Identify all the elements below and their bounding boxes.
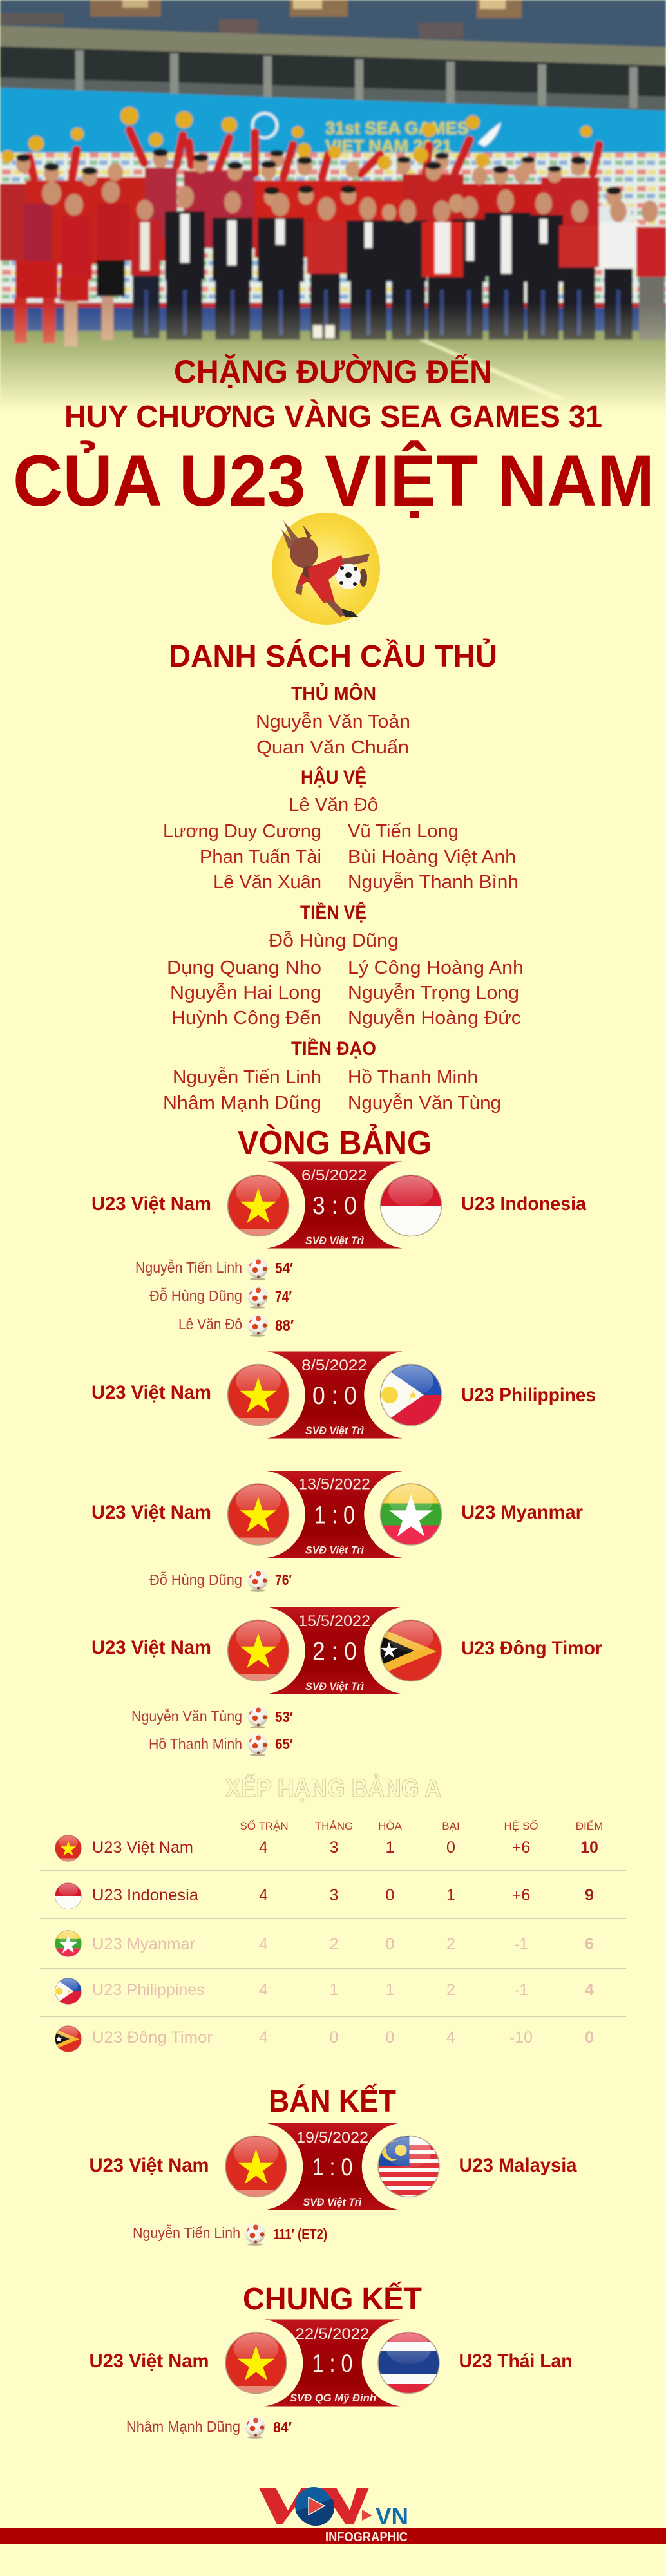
match 2: Vietnam 0-0 Philippines: 0 : 0: [312, 1382, 357, 1410]
row: Myanmar: 0: [386, 1935, 394, 1953]
front row red jackets: [307, 222, 347, 274]
row: Vietnam: U23 Việt Nam: [92, 1839, 193, 1857]
midfielders: [167, 902, 524, 1028]
forwards: Nguyễn Văn Tùng: [348, 1092, 501, 1113]
scorer: semi-final: 111′ (ET2): [273, 2226, 327, 2242]
heading: player list: DANH SÁCH CẦU THỦ: [169, 638, 497, 674]
row: Vietnam: 4: [259, 1839, 268, 1857]
match 2: Vietnam 0-0 Philippines: SVĐ Việt Trì: [305, 1425, 364, 1437]
scorers: match 4: 53′: [275, 1709, 293, 1725]
match 1: Vietnam 3-0 Indonesia: 6/5/2022: [301, 1167, 367, 1184]
defenders: Lê Văn Xuân: [213, 872, 321, 893]
scorers: match 4: Hồ Thanh Minh: [149, 1736, 242, 1752]
final match: Vietnam 1-0 Thailand: U23 Việt Nam: [89, 2351, 209, 2372]
scorer: final: Nhâm Mạnh Dũng: [126, 2418, 240, 2435]
scorers: match 3: [149, 1570, 292, 1592]
match 3: Vietnam 1-0 Myanmar: 1 : 0: [314, 1502, 355, 1529]
midfielders: Nguyễn Hoàng Đức: [348, 1007, 521, 1028]
defenders: Lê Văn Đô: [289, 795, 378, 815]
defenders: Lương Duy Cương: [163, 821, 321, 842]
row: Myanmar: [55, 1930, 594, 1957]
row: Philippines: 4: [585, 1981, 594, 1999]
title: [13, 354, 654, 521]
defenders: Bùi Hoàng Việt Anh: [348, 847, 516, 867]
forwards: Nhâm Mạnh Dũng: [163, 1093, 321, 1113]
hero photo: team celebrating on the podium: 31st SEA GAMES: [325, 118, 469, 138]
midfielders: Huỳnh Công Đến: [171, 1008, 321, 1028]
hero photo: team celebrating on the podium: VIET NAM 2021: [325, 137, 452, 156]
row: Indonesia: +6: [512, 1886, 530, 1904]
scorer: final: 84′: [273, 2419, 292, 2436]
match 1: Vietnam 3-0 Indonesia: SVĐ Việt Trì: [305, 1235, 364, 1247]
row: Indonesia: 0: [386, 1886, 394, 1904]
match 3: Vietnam 1-0 Myanmar: U23 Việt Nam: [91, 1502, 211, 1523]
gaps between the legs: [144, 290, 620, 335]
title: CHẶNG ĐƯỜNG ĐẾN: [174, 354, 492, 390]
front row players: [24, 204, 52, 265]
row: Timor-Leste: 0: [330, 2029, 338, 2047]
match 3: Vietnam 1-0 Myanmar: U23 Myanmar: [461, 1502, 583, 1523]
row: Philippines: 1: [330, 1981, 338, 1999]
midfielders: Nguyễn Hai Long: [170, 982, 321, 1003]
row: Vietnam: 10: [580, 1839, 598, 1857]
defenders: Phan Tuấn Tài: [200, 847, 321, 867]
row: Vietnam: 0: [446, 1839, 455, 1857]
scorers: match 3: Đỗ Hùng Dũng: [149, 1571, 242, 1588]
heading: group stage: VÒNG BẢNG: [238, 1124, 432, 1162]
table header: SỐ TRẬN: [240, 1819, 289, 1832]
row: Philippines: [54, 1977, 594, 2005]
defenders: HẬU VỆ: [301, 766, 366, 788]
match 3: Vietnam 1-0 Myanmar: 13/5/2022: [298, 1476, 370, 1493]
row: Indonesia: 3: [330, 1886, 338, 1904]
semi-final match: Vietnam 1-0 Malaysia: 1 : 0: [312, 2154, 353, 2181]
player list: [163, 683, 524, 1113]
scorers: match 4: 65′: [275, 1736, 293, 1752]
front row officials in suits: [165, 211, 633, 340]
match 4: Vietnam 2-0 Timor-Leste: SVĐ Việt Trì: [305, 1680, 364, 1692]
match 4: Vietnam 2-0 Timor-Leste: U23 Đông Timor: [461, 1638, 602, 1659]
scorers: match 1: Đỗ Hùng Dũng: [149, 1287, 242, 1304]
row: Philippines: -1: [514, 1981, 528, 1999]
scorers: match 1: 88′: [275, 1317, 294, 1334]
goalkeepers: THỦ MÔN: [291, 683, 376, 705]
midfielders: Dụng Quang Nho: [167, 958, 321, 978]
row: Timor-Leste: [54, 2025, 594, 2052]
match 1: Vietnam 3-0 Indonesia: [91, 1162, 586, 1248]
scorers: match 1: 74′: [275, 1288, 292, 1305]
row: Philippines: 4: [259, 1981, 268, 1999]
row: Timor-Leste: 4: [446, 2029, 455, 2047]
row: Indonesia: 4: [259, 1886, 268, 1904]
goalkeepers: Quan Văn Chuẩn: [256, 737, 409, 758]
logo: VOV.VN: VN: [376, 2503, 408, 2530]
scorers: match 1: Lê Văn Đô: [178, 1316, 242, 1332]
scorers: match 4: [131, 1707, 293, 1756]
row: Vietnam: +6: [512, 1839, 530, 1857]
match 2: Vietnam 0-0 Philippines: U23 Việt Nam: [91, 1382, 211, 1403]
table header: BẠI: [442, 1820, 460, 1832]
row: Timor-Leste: U23 Đông Timor: [92, 2029, 213, 2047]
goalkeepers: Nguyễn Văn Toản: [256, 711, 410, 732]
table header: HỆ SỐ: [504, 1819, 538, 1832]
row: Vietnam: [55, 1835, 598, 1862]
row: Myanmar: 6: [585, 1935, 594, 1953]
semi-final match: Vietnam 1-0 Malaysia: 19/5/2022: [296, 2129, 368, 2146]
row: Philippines: 1: [386, 1981, 394, 1999]
midfielders: Đỗ Hùng Dũng: [269, 930, 399, 951]
semi-final match: Vietnam 1-0 Malaysia: U23 Việt Nam: [89, 2155, 209, 2176]
match 2: Vietnam 0-0 Philippines: 8/5/2022: [301, 1357, 367, 1374]
standings table: [40, 1819, 626, 2052]
row: Myanmar: -1: [514, 1935, 528, 1953]
goalkeepers: [256, 683, 410, 758]
row: Myanmar: 4: [259, 1935, 268, 1953]
scorer: semi-final: [133, 2223, 327, 2246]
final match: Vietnam 1-0 Thailand: SVĐ QG Mỹ Đình: [290, 2392, 376, 2404]
row: Myanmar: U23 Myanmar: [92, 1935, 195, 1953]
row: Vietnam: 1: [386, 1839, 394, 1857]
scorers: match 4: Nguyễn Văn Tùng: [131, 1708, 242, 1725]
final match: Vietnam 1-0 Thailand: 1 : 0: [312, 2350, 353, 2378]
semi-final match: Vietnam 1-0 Malaysia: SVĐ Việt Trì: [303, 2196, 362, 2208]
defenders: [163, 766, 519, 893]
raised arms: [30, 130, 599, 180]
match 4: Vietnam 2-0 Timor-Leste: 2 : 0: [312, 1638, 357, 1665]
title: CỦA U23 VIỆT NAM: [13, 440, 654, 521]
forwards: Nguyễn Tiến Linh: [173, 1066, 321, 1088]
table header: HÒA: [378, 1820, 403, 1832]
match 2: Vietnam 0-0 Philippines: [91, 1351, 596, 1439]
match 4: Vietnam 2-0 Timor-Leste: 15/5/2022: [298, 1613, 370, 1630]
match 3: Vietnam 1-0 Myanmar: SVĐ Việt Trì: [305, 1544, 364, 1556]
row: Indonesia: U23 Indonesia: [92, 1886, 198, 1904]
scorers: match 1: 54′: [275, 1260, 293, 1276]
row: Vietnam: 3: [330, 1839, 338, 1857]
back row heads: [16, 150, 622, 221]
scorers: match 1: [135, 1258, 294, 1337]
scorer: final: [126, 2416, 292, 2439]
midfielders: Nguyễn Trọng Long: [348, 982, 519, 1003]
heading: group A standings (outlined): XẾP HẠNG BẢNG A: [225, 1773, 441, 1803]
scorers: match 3: 76′: [275, 1571, 292, 1588]
row: Philippines: 2: [446, 1981, 455, 1999]
footer bar: INFOGRAPHIC: [325, 2530, 408, 2544]
logo: VOV.VN: [259, 2487, 408, 2530]
row: Philippines: U23 Philippines: [92, 1981, 205, 1999]
final match: Vietnam 1-0 Thailand: 22/5/2022: [295, 2325, 370, 2343]
bouquets: [1, 107, 592, 170]
row: Timor-Leste: 0: [585, 2029, 594, 2047]
match 2: Vietnam 0-0 Philippines: U23 Philippines: [461, 1385, 596, 1406]
match 1: Vietnam 3-0 Indonesia: U23 Indonesia: [461, 1193, 586, 1215]
semi-final match: Vietnam 1-0 Malaysia: [89, 2123, 577, 2210]
scorer: semi-final: Nguyễn Tiến Linh: [133, 2224, 240, 2241]
match 3: Vietnam 1-0 Myanmar: [91, 1471, 583, 1558]
defenders: Nguyễn Thanh Bình: [348, 871, 519, 893]
heading: semi-final: BÁN KẾT: [269, 2084, 396, 2119]
table header: THẮNG: [315, 1820, 353, 1832]
table header: ĐIỂM: [576, 1820, 603, 1832]
defenders: Vũ Tiến Long: [348, 821, 459, 842]
midfielders: Lý Công Hoàng Anh: [348, 958, 524, 978]
row: Myanmar: 2: [446, 1935, 455, 1953]
row: Timor-Leste: -10: [509, 2029, 533, 2047]
row: Indonesia: [55, 1882, 594, 1909]
forwards: Hồ Thanh Minh: [348, 1067, 478, 1088]
semi-final match: Vietnam 1-0 Malaysia: U23 Malaysia: [459, 2155, 577, 2176]
row: Timor-Leste: 4: [259, 2029, 268, 2047]
row: Indonesia: 1: [446, 1886, 455, 1904]
title: HUY CHƯƠNG VÀNG SEA GAMES 31: [64, 399, 602, 434]
icon: mascot goat kicking a ball on a gold medal: [272, 513, 380, 625]
forwards: [163, 1037, 501, 1113]
match 1: Vietnam 3-0 Indonesia: 3 : 0: [312, 1192, 357, 1220]
footer bar: [0, 2528, 666, 2544]
final match: Vietnam 1-0 Thailand: [89, 2320, 572, 2406]
row: Indonesia: 9: [585, 1886, 594, 1904]
scorers: match 1: Nguyễn Tiến Linh: [135, 1259, 242, 1276]
final match: Vietnam 1-0 Thailand: U23 Thái Lan: [459, 2351, 572, 2372]
heading: final: CHUNG KẾT: [243, 2282, 422, 2316]
match 1: Vietnam 3-0 Indonesia: U23 Việt Nam: [91, 1193, 211, 1215]
row: Myanmar: 2: [330, 1935, 338, 1953]
hero photo: team celebrating on the podium: [0, 0, 666, 419]
forwards: TIỀN ĐẠO: [291, 1037, 376, 1059]
row: Timor-Leste: 0: [386, 2029, 394, 2047]
match 4: Vietnam 2-0 Timor-Leste: U23 Việt Nam: [91, 1637, 211, 1658]
back row torsos: [0, 184, 39, 261]
midfielders: TIỀN VỆ: [300, 902, 366, 923]
match 4: Vietnam 2-0 Timor-Leste: [91, 1607, 602, 1694]
table header: [240, 1819, 603, 1832]
